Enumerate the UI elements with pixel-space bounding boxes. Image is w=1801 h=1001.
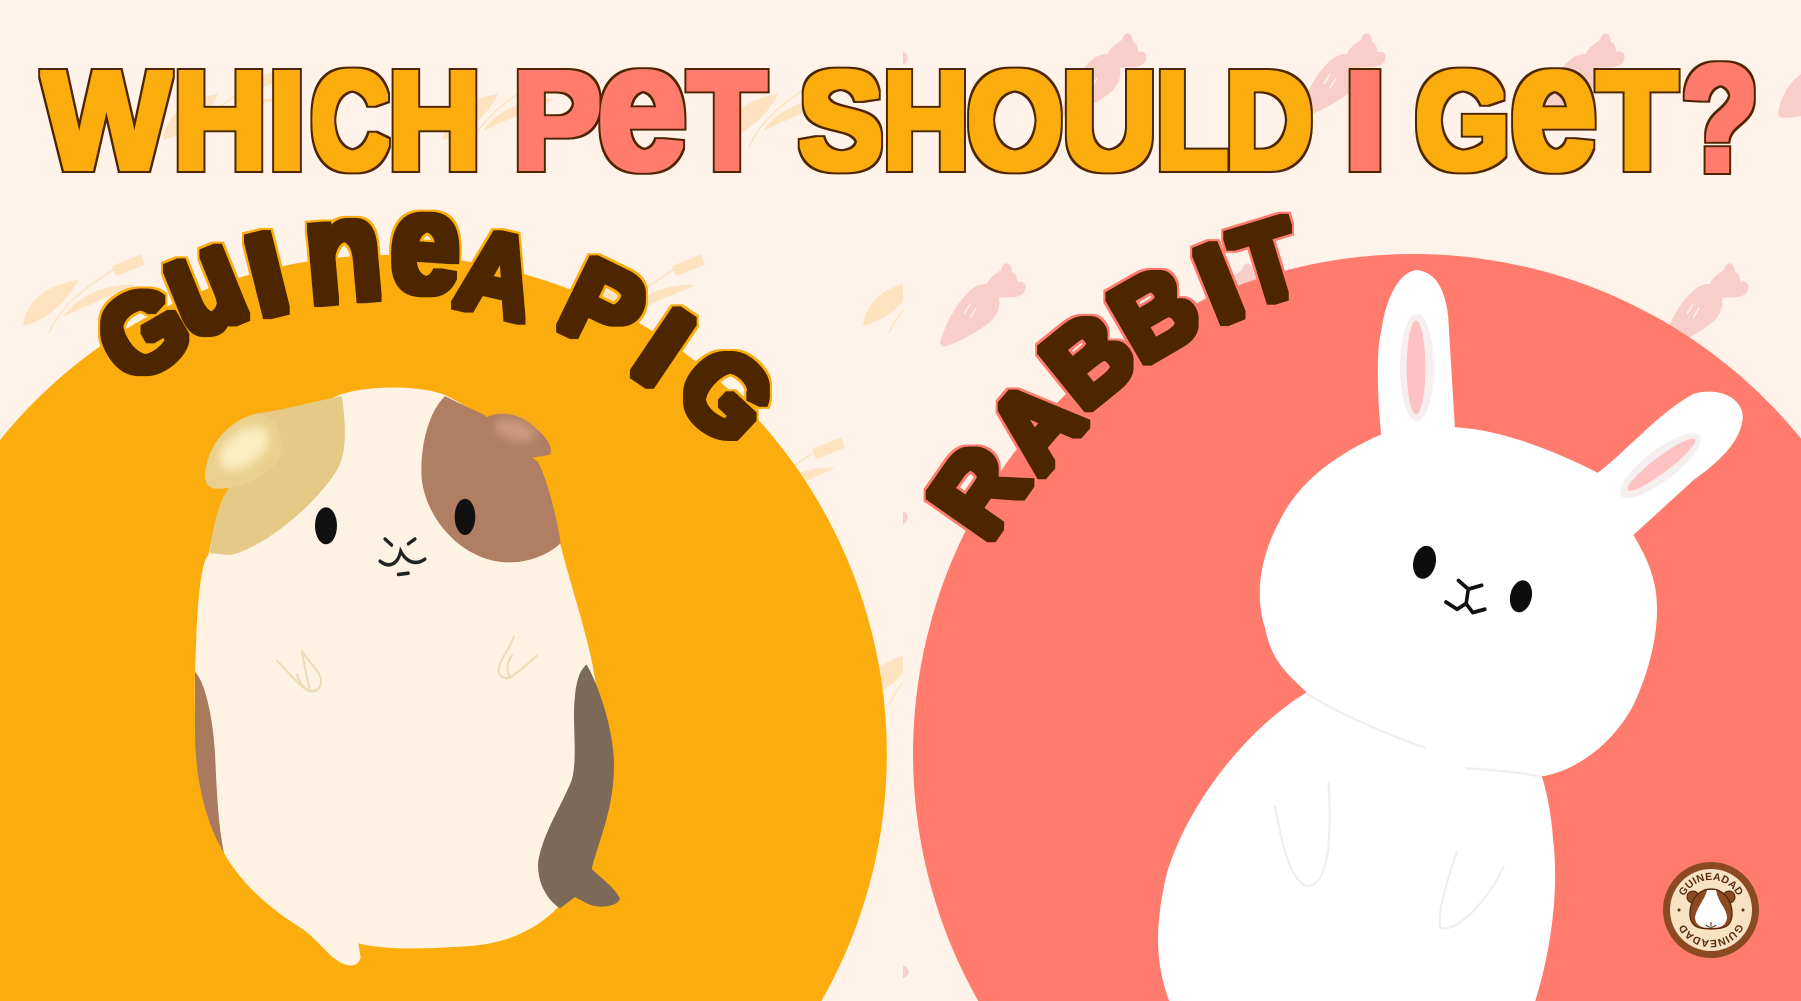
- guinea pig body: [195, 387, 609, 966]
- heading: Guinea Pig: I: [613, 286, 713, 410]
- illustration: rabbit: [1158, 270, 1743, 1001]
- title: I: [268, 44, 306, 198]
- yellow head patch: [205, 396, 345, 555]
- rabbit paws and neck lines: [1275, 693, 1542, 928]
- title: T: [688, 44, 766, 198]
- orange circle: guinea pig panel: [0, 255, 887, 1001]
- title: L: [1156, 44, 1228, 198]
- heading: Guinea Pig: G: [655, 322, 798, 467]
- title: P: [513, 44, 601, 198]
- title: e: [597, 7, 687, 206]
- right side patch and foot: [538, 665, 620, 908]
- mouth: [380, 539, 425, 574]
- heading: Guinea Pig: P: [543, 234, 664, 379]
- heading: Rabbit: [906, 195, 1315, 558]
- title: I: [1343, 44, 1387, 198]
- heading: Rabbit: B: [1021, 288, 1157, 431]
- title: O: [967, 44, 1063, 198]
- left ear highlight: [214, 418, 274, 479]
- right inner ear: [1612, 423, 1708, 508]
- heading: Rabbit: I: [1179, 220, 1259, 347]
- heading: Guinea Pig: e: [386, 162, 466, 325]
- title: H: [883, 44, 969, 198]
- paws: [277, 636, 538, 691]
- title: D: [1225, 44, 1313, 198]
- title: e: [1510, 7, 1597, 206]
- carrot pattern background: [822, 33, 1801, 978]
- left ear: [205, 413, 281, 489]
- title: H: [173, 44, 267, 198]
- title: T: [1597, 44, 1677, 198]
- right ear: [479, 414, 551, 457]
- logo text: GUINEADAD: [1680, 925, 1743, 948]
- heading: Rabbit: A: [966, 357, 1106, 493]
- wheat pattern background: [23, 68, 985, 705]
- title: H: [388, 44, 481, 198]
- left inner ear: [1400, 314, 1434, 421]
- rabbit body: [1158, 693, 1555, 1001]
- title: S: [799, 44, 883, 198]
- logo badge: Guineadad: [1663, 862, 1759, 958]
- title: ?: [1682, 34, 1758, 202]
- red circle: rabbit panel: [913, 254, 1801, 1001]
- heading: Guinea Pig: u: [141, 196, 265, 369]
- left side patch: [195, 672, 224, 853]
- right ear highlight: [493, 416, 537, 445]
- logo side dots: [1678, 908, 1744, 912]
- brown head patch: [421, 396, 561, 562]
- title: C: [311, 44, 389, 198]
- heading: Rabbit: R: [906, 424, 1052, 558]
- rabbit eyes: [1410, 543, 1535, 615]
- heading: Guinea Pig: n: [298, 166, 388, 335]
- heading: Guinea Pig: I: [233, 207, 301, 342]
- title: [43, 7, 1758, 206]
- heading: Rabbit: B: [1091, 241, 1218, 386]
- eyes: [315, 499, 475, 544]
- logo text: GUINEADAD: [1679, 872, 1742, 895]
- title: U: [1062, 44, 1157, 198]
- heading: Rabbit: T: [1219, 195, 1315, 331]
- logo text: [1679, 872, 1743, 948]
- title: W: [43, 44, 171, 198]
- heading: Guinea Pig: A: [447, 205, 547, 346]
- illustration: guinea pig: [195, 387, 620, 966]
- heading: Guinea Pig: G: [77, 259, 209, 406]
- title: G: [1415, 44, 1510, 198]
- logo guinea pig face: [1687, 889, 1735, 929]
- rabbit mouth: [1446, 581, 1485, 613]
- heading: Guinea Pig: [77, 162, 798, 467]
- rabbit head and ears: [1260, 270, 1743, 776]
